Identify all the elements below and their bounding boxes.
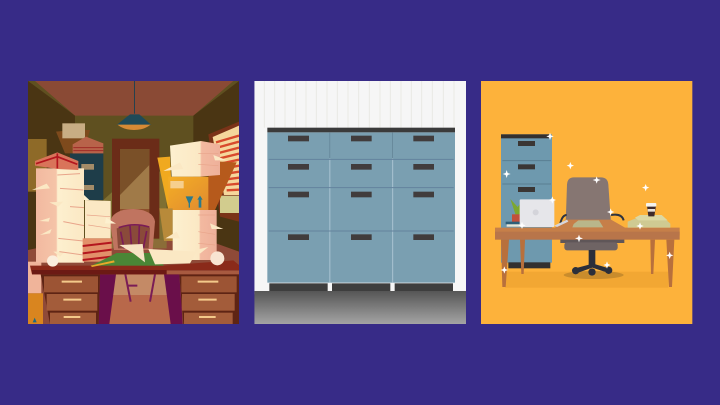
potted plant (510, 199, 521, 224)
desk with drawers (30, 260, 239, 324)
column gaps (330, 132, 393, 158)
floor (28, 240, 239, 324)
floor shadow (505, 272, 668, 288)
ceiling lamp (117, 81, 151, 130)
wall (254, 81, 466, 294)
chair shadow (564, 271, 624, 279)
floor seen under desk (113, 274, 167, 295)
laptop (520, 199, 568, 227)
panel: tidy filing wall (254, 81, 466, 324)
left wall lower shelf (28, 262, 43, 324)
cardboard box (157, 157, 237, 210)
coffee cup (646, 203, 656, 216)
drawer handles (288, 136, 434, 240)
loose paper (148, 249, 197, 264)
red books under middle stack (83, 238, 112, 262)
filing cabinet (501, 134, 552, 268)
sparkles (501, 133, 673, 274)
middle paper stack (84, 195, 116, 238)
chair armrests (560, 215, 624, 223)
left paper stack (32, 168, 84, 263)
desktop (30, 260, 239, 274)
left wall picture board (28, 139, 47, 192)
wall stripes (264, 81, 454, 128)
door (112, 139, 159, 239)
floor (254, 291, 466, 324)
document on desk (572, 220, 603, 227)
box behind right stack (159, 208, 173, 241)
boxes on cabinet (56, 123, 103, 153)
back wall (28, 81, 239, 240)
books under laptop (506, 222, 523, 227)
right paper stack upper (163, 141, 227, 177)
window with blinds (208, 122, 239, 222)
cabinet bases (269, 283, 453, 291)
desk legs (99, 274, 183, 324)
left drawers (41, 274, 100, 324)
desk (495, 220, 680, 287)
light beam (103, 172, 167, 248)
cabinet body (267, 132, 455, 283)
chair seat (560, 238, 624, 243)
chair (110, 209, 155, 250)
right paper stack lower (165, 210, 223, 260)
desktop front edge (495, 232, 680, 240)
stack of books (628, 215, 670, 228)
side walls (28, 81, 239, 262)
filing cabinets (267, 128, 455, 291)
infographic canvas (28, 81, 692, 324)
right drawers (179, 274, 239, 324)
ceiling (35, 81, 233, 116)
panel: cluttered office (28, 81, 239, 324)
green desk blotter (93, 253, 116, 265)
chair back (566, 177, 611, 223)
crumpled paper balls (47, 251, 224, 267)
desk back surface (495, 220, 680, 236)
drawer seams (269, 159, 454, 231)
pencil (91, 260, 115, 267)
cabinet top edge (267, 128, 455, 132)
yellow background (481, 81, 692, 324)
panel: organized desk (481, 81, 692, 324)
chair legs under desk (125, 274, 155, 302)
navy filing cabinet (70, 153, 103, 200)
blotter front (92, 253, 164, 266)
desk legs (501, 240, 674, 287)
office chair (560, 177, 624, 276)
paper plane (119, 244, 145, 262)
red book stack on left pile (35, 152, 78, 170)
chair stem and base (589, 250, 595, 267)
